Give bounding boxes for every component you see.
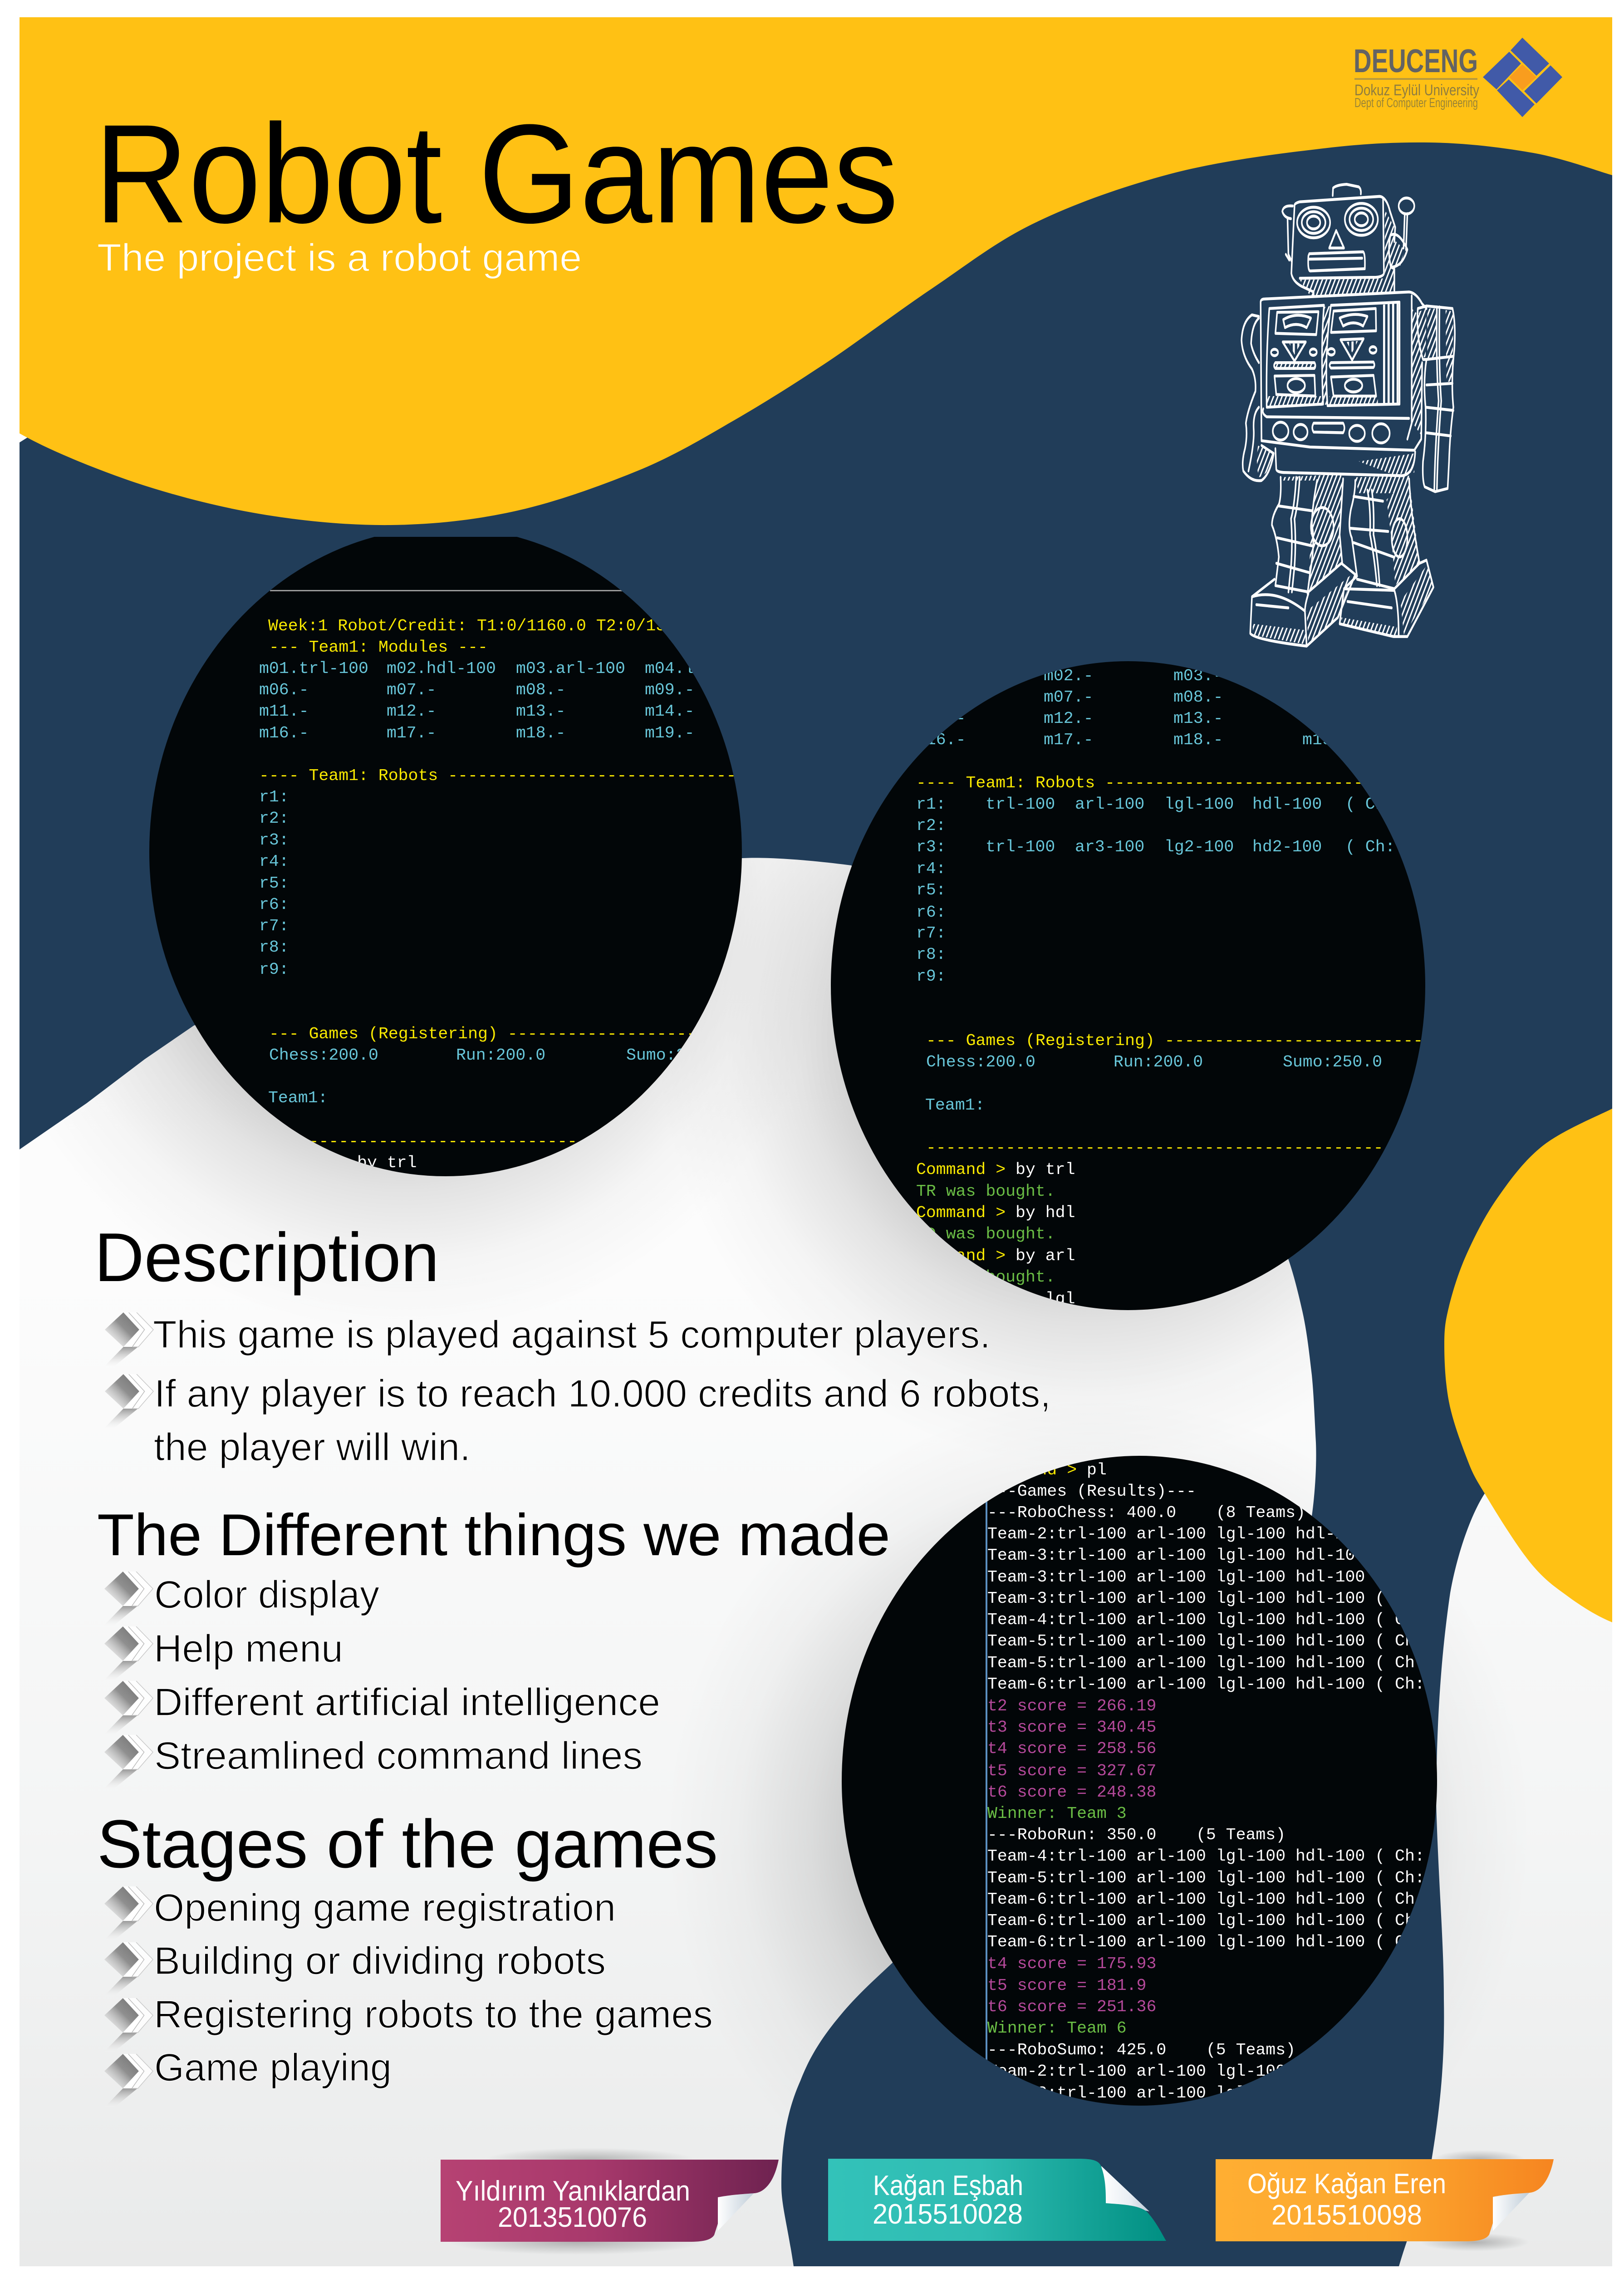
terminal text: Command > by arl <box>916 1247 1075 1265</box>
terminal text: ( Ch: <box>1345 795 1395 814</box>
circle background <box>831 661 1425 1310</box>
terminal text: m11.- <box>916 709 966 728</box>
terminal text: m06.- <box>259 681 309 699</box>
terminal text: Team-5:trl-100 arl-100 lgl-100 hdl-100 ( Ch: <box>987 1654 1425 1672</box>
terminal text: r5: <box>259 874 289 893</box>
terminal text: Team-5:trl-100 arl-100 lgl-100 hdl-100 ( Ch: <box>987 1869 1425 1887</box>
terminal text: m04.- <box>1302 667 1352 685</box>
terminal text: ---- Team1: Robots ------------------------------ <box>259 766 746 785</box>
terminal text: r9: <box>259 960 289 979</box>
terminal text: t5 score = 181.9 <box>987 1976 1146 1995</box>
terminal text: Chess:200.0 <box>926 1053 1035 1071</box>
terminal text: m03.arl-100 <box>516 659 625 678</box>
terminal text: ---RoboSumo: 425.0 (5 Teams) <box>987 2041 1295 2059</box>
terminal text: Team-6:trl-100 arl-100 lgl-100 hdl-100 ( Ch: <box>987 1890 1425 1909</box>
logo diamond mark <box>1483 38 1562 117</box>
terminal text: m12.- <box>1044 709 1094 728</box>
robot feet <box>1250 560 1433 646</box>
terminal text: arl-100 <box>1075 795 1144 814</box>
terminal text: ---Games (Results)--- <box>987 1482 1196 1501</box>
ribbon: Yıldırım Yanıklardan <box>441 2148 779 2255</box>
robot head <box>1282 184 1414 296</box>
terminal text: m19.- <box>645 724 695 742</box>
terminal text: hdl-100 <box>1252 795 1322 814</box>
terminal text: Team-3:trl-100 arl-100 lgl-100 hdl-100 <box>987 2084 1365 2102</box>
terminal text: Team-6:trl-100 arl-100 lgl-100 hdl-100 ( Ch: <box>987 1933 1425 1951</box>
terminal text: Team-5:trl-100 arl-100 lgl-100 hdl-100 ( Ch: <box>987 1632 1425 1650</box>
robot torso <box>1261 292 1427 476</box>
terminal text <box>916 667 1443 1308</box>
terminal text: Team1: <box>268 1089 328 1107</box>
terminal text: t4 score = 175.93 <box>987 1955 1156 1973</box>
text: color display: Color display <box>154 1573 379 1616</box>
text: help menu: Help menu <box>154 1627 343 1670</box>
yellow top wave <box>20 17 1612 525</box>
icon: bullet chevron <box>104 1886 153 1940</box>
logo: DEUCENG <box>1354 38 1562 117</box>
icon: bullet chevron <box>104 1626 153 1680</box>
terminal text: Command > by trl <box>916 1160 1075 1179</box>
terminal text: trl-100 <box>986 795 1055 814</box>
terminal text: ar3-100 <box>1075 838 1144 856</box>
terminal text: Chess:200.0 <box>269 1046 378 1065</box>
terminal text: Winner: Team 3 <box>987 1804 1127 1823</box>
terminal text <box>986 1461 1425 2102</box>
terminal text: Sumo:250.0 <box>1283 1053 1382 1071</box>
circle background <box>149 537 742 1176</box>
terminal text: lg2-100 <box>1164 838 1234 856</box>
terminal text: m09.- <box>1302 688 1352 707</box>
terminal text: hd2-100 <box>1252 838 1322 856</box>
terminal text: --- Team1: Modules --- <box>269 638 488 657</box>
text: bullet 2: If any player is to reach 10.000 credits and 6 robots, <box>154 1372 1051 1415</box>
terminal text: Run:200.0 <box>456 1046 545 1065</box>
text: building or dividing robots: Building or dividing robots <box>154 1940 606 1983</box>
student number: 2013510076 <box>498 2202 647 2233</box>
terminal text: Sumo:250.0 <box>626 1046 726 1065</box>
terminal text: Team1: <box>925 1096 985 1115</box>
terminal text: m18.- <box>1173 731 1223 749</box>
terminal text: r9: <box>916 967 946 986</box>
terminal text: r7: <box>916 924 946 943</box>
text: streamlined command lines: Streamlined command lines <box>154 1734 643 1778</box>
terminal text: r8: <box>259 938 289 957</box>
terminal text: Command > by trl <box>258 1154 417 1172</box>
terminal text: r5: <box>916 881 946 899</box>
terminal text: r6: <box>259 895 289 914</box>
terminal text: AR was bought. <box>916 1268 1055 1287</box>
terminal text: m13.- <box>1173 709 1223 728</box>
terminal text: Week:1 Robot/Credit: T1:0/1160.0 T2:0/1300.0 <box>268 617 706 635</box>
terminal text: trl-100 <box>986 838 1055 856</box>
icon: bullet chevron <box>104 1998 153 2052</box>
terminal text: m02.hdl-100 <box>387 659 496 678</box>
terminal text: ( Ch: <box>1345 838 1395 856</box>
terminal text: m07.- <box>1044 688 1094 707</box>
icon: bullet chevron <box>104 1572 153 1625</box>
section: stages of the games <box>97 1806 718 2107</box>
robot legs <box>1272 474 1419 594</box>
terminal text: m16.- <box>916 731 966 749</box>
terminal text <box>258 590 766 1172</box>
ribbon: Kağan Eşbah <box>828 2159 1166 2241</box>
panel: terminal screenshot circle 2 <box>831 661 1443 1310</box>
heading: The Different things we made: The Different things we made <box>97 1502 890 1568</box>
terminal text: m12.- <box>387 702 437 721</box>
name: Oğuz Kağan Eren <box>1247 2168 1446 2200</box>
terminal text: r3: <box>916 838 946 856</box>
name: Kağan Eşbah <box>873 2170 1023 2201</box>
icon: bullet chevron <box>104 1942 153 1996</box>
text: bullet 2 continuation: the player will win. <box>154 1426 471 1469</box>
ribbon: Oğuz Kağan Eren <box>1216 2150 1554 2251</box>
text: game playing: Game playing <box>154 2046 392 2089</box>
text: registering robots to the games: Registering robots to the games <box>154 1993 713 2036</box>
terminal text: m14.- <box>1302 709 1352 728</box>
terminal text: m09.- <box>645 681 695 699</box>
section: the different things we made <box>97 1502 890 1788</box>
robot illustration <box>1241 184 1455 646</box>
section: description <box>94 1219 1051 1469</box>
terminal text: r8: <box>916 945 946 964</box>
logo wordmark: Dept of Computer Engineering <box>1354 96 1478 110</box>
terminal text: Team-3:trl-100 arl-100 lgl-100 hdl-100 ( Ch: <box>987 1546 1425 1565</box>
terminal text: r4: <box>259 852 289 871</box>
terminal text: t3 score = 340.45 <box>987 1718 1156 1737</box>
terminal text: m14.- <box>645 702 695 721</box>
terminal text: r6: <box>916 903 946 922</box>
terminal text: lgl-100 <box>1164 795 1234 814</box>
terminal text: r7: <box>259 917 289 935</box>
logo wordmark: DEUCENG <box>1354 43 1478 79</box>
logo wordmark <box>1354 43 1479 110</box>
terminal text: t5 score = 327.67 <box>987 1762 1156 1780</box>
terminal text: TR was bought. <box>916 1182 1055 1201</box>
heading: Description: Description <box>94 1219 439 1296</box>
circle background <box>842 1456 1437 2106</box>
icon: bullet chevron <box>104 1681 153 1734</box>
icon: bullet chevron <box>104 1735 153 1788</box>
terminal text: ---- Team1: Robots ---------------------------------- <box>916 774 1443 792</box>
terminal text: m02.- <box>1044 667 1094 685</box>
text: bullet 1: This game is played against 5 computer players. <box>153 1313 991 1356</box>
terminal text: Team-2:trl-100 arl-100 lgl-100 hdl-100 <box>987 2062 1365 2081</box>
panel: terminal screenshot circle 3 <box>842 1456 1437 2106</box>
logo wordmark: Dokuz Eylül University <box>1354 82 1479 99</box>
terminal text: m17.- <box>387 724 437 742</box>
terminal text: Team-3:trl-100 arl-100 lgl-100 hdl-100 ( Ch: <box>987 1568 1425 1586</box>
terminal text: r4: <box>916 859 946 878</box>
terminal text: Team-6:trl-100 arl-100 lgl-100 hdl-100 ( Ch: <box>987 1911 1425 1930</box>
terminal text: Command > by hdl <box>916 1203 1075 1222</box>
text: different artificial intelligence: Different artificial intelligence <box>154 1681 660 1724</box>
terminal text: Winner: Team 6 <box>987 2019 1127 2038</box>
terminal text: -------------------------------------------- <box>269 1132 707 1151</box>
icon: bullet chevron <box>105 1374 153 1428</box>
circle drop shadows <box>20 421 1580 2266</box>
terminal text: m07.- <box>387 681 437 699</box>
subtitle: The project is a robot game <box>97 236 582 280</box>
terminal text: r1: <box>259 788 289 806</box>
robot arms <box>1241 306 1455 491</box>
terminal text: --- Games (Registering) -------------------------- <box>269 1025 766 1043</box>
terminal text: r3: <box>259 831 289 850</box>
terminal text: Command > by lgl <box>916 1290 1075 1308</box>
terminal text: m01.trl-100 <box>259 659 368 678</box>
icon: bullet chevron <box>105 1312 153 1366</box>
terminal text: m13.- <box>516 702 566 721</box>
terminal text: m18.- <box>516 724 566 742</box>
terminal text: m17.- <box>1044 731 1094 749</box>
text: opening game registration: Opening game registration <box>154 1886 616 1930</box>
terminal text: Team-4:trl-100 arl-100 lgl-100 hdl-100 ( Ch: <box>987 1847 1425 1866</box>
terminal text: Team-2:trl-100 arl-100 lgl-100 hdl-100 ( Ch: <box>987 1525 1425 1543</box>
title: Robot Games <box>94 95 898 252</box>
terminal text: ---RoboRun: 350.0 (5 Teams) <box>987 1826 1285 1844</box>
terminal text: ---RoboChess: 400.0 (8 Teams) <box>987 1503 1305 1522</box>
terminal text: r2: <box>259 809 289 828</box>
icon: bullet chevron <box>104 2054 153 2107</box>
name: Yıldırım Yanıklardan <box>456 2176 690 2207</box>
heading: Stages of the games: Stages of the games <box>97 1806 718 1882</box>
terminal text: Team-3:trl-100 arl-100 lgl-100 hdl-100 ( Ch: <box>987 1589 1425 1608</box>
terminal text: --- Games (Registering) ---------------------------- <box>926 1031 1443 1050</box>
terminal text: m19.- <box>1302 731 1352 749</box>
terminal text: r1: <box>916 795 946 814</box>
terminal text: m08.- <box>516 681 566 699</box>
terminal text: m08.- <box>1173 688 1223 707</box>
terminal text: r2: <box>916 816 946 835</box>
terminal text: t2 score = 266.19 <box>987 1697 1156 1715</box>
terminal text: t4 score = 258.56 <box>987 1739 1156 1758</box>
terminal text: Run:200.0 <box>1114 1053 1203 1071</box>
terminal text: m03.- <box>1173 667 1223 685</box>
terminal text: m16.- <box>259 724 309 742</box>
student number: 2015510028 <box>873 2199 1023 2230</box>
terminal text: m11.- <box>259 702 309 721</box>
yellow right shape <box>1444 1109 1612 1622</box>
terminal text: m06.- <box>916 688 966 707</box>
terminal text: ---------------------------------------------------- <box>926 1139 1443 1157</box>
student number: 2015510098 <box>1271 2200 1422 2231</box>
terminal text: t6 score = 251.36 <box>987 1998 1156 2016</box>
panel: terminal screenshot circle 1 <box>149 537 766 1176</box>
terminal text: Team-6:trl-100 arl-100 lgl-100 hdl-100 ( Ch: <box>987 1675 1425 1694</box>
terminal text: Command > pl <box>987 1461 1107 1479</box>
terminal text: Team-4:trl-100 arl-100 lgl-100 hdl-100 ( Ch: <box>987 1611 1425 1629</box>
terminal text: HD was bought. <box>916 1225 1055 1243</box>
terminal text: t6 score = 248.38 <box>987 1783 1156 1802</box>
terminal text: m04.lgl-100 <box>645 659 754 678</box>
